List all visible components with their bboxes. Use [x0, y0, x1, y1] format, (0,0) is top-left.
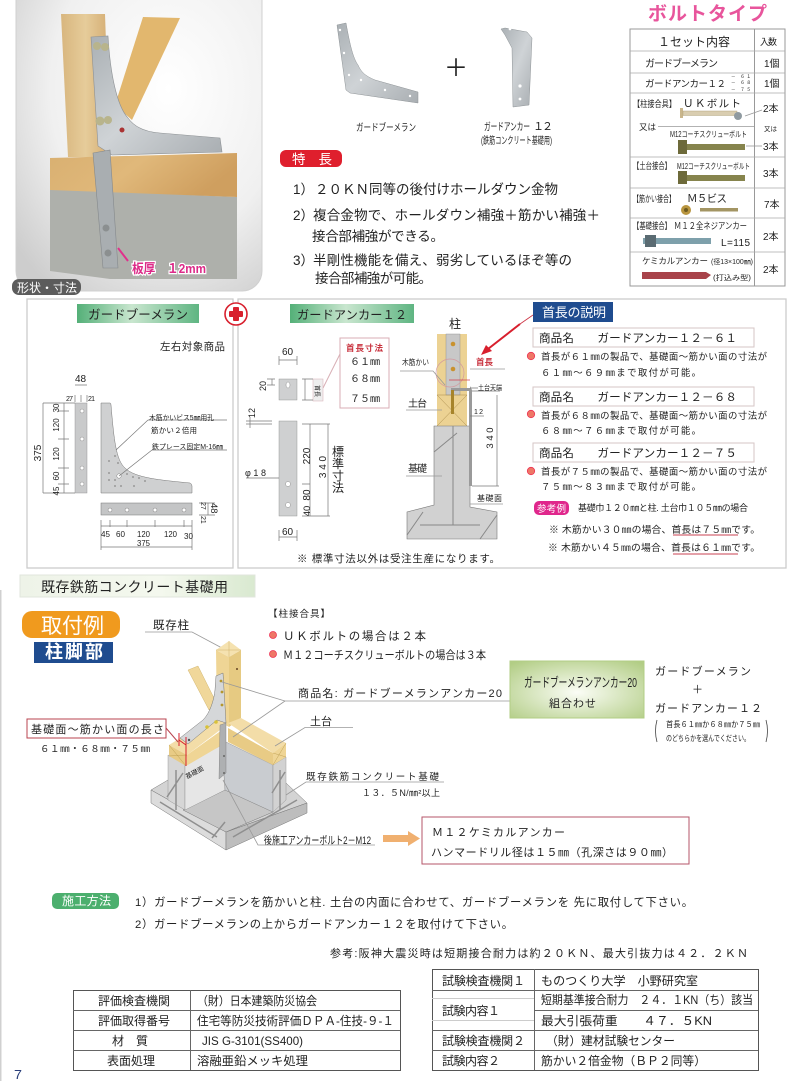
table: test results: 最大引張荷重 ４７．５KN [541, 1014, 712, 1028]
text: feature list [293, 181, 600, 286]
badge: installation example [22, 611, 120, 638]
table: set contents: ＵＫボルト [683, 98, 741, 110]
photo callout: plate thickness: 板厚 １2mm [132, 261, 206, 276]
tag: construction method [52, 893, 119, 909]
arrow: to chemical anchor [383, 831, 420, 846]
dimensions: boomerang: 筋かい２倍用 [151, 425, 197, 435]
text: example condition: 基礎巾１２０㎜と柱. 土台巾１０５㎜の場合 [578, 502, 748, 513]
photo: boomerang plate [91, 36, 222, 155]
dimensions: boomerang: 60 [116, 529, 125, 539]
text: 61 explanation [527, 351, 768, 378]
labels: section view: 基礎面 [477, 493, 502, 503]
table: set contents: 2本 [763, 102, 779, 115]
text: 68 explanation: ６８㎜～７６㎜まで取付が可能。 [541, 425, 701, 436]
table: evaluation: 住宅等防災技術評価ＤＰＡ-住技-９-１ [197, 1013, 394, 1028]
labels: section view: 柱 [449, 317, 461, 331]
labels: section view: 基礎 [408, 462, 427, 475]
tag: reference example [534, 501, 569, 515]
badge: post base: 柱脚部 [45, 642, 103, 662]
table: set contents: 又は [764, 125, 778, 133]
photo callout: plate thickness [118, 248, 206, 276]
sills [228, 718, 286, 753]
heading: guard anchor 12 [290, 304, 414, 323]
text: feature list: ２０ＫＮ同等の後付けホールダウン金物 [315, 181, 558, 197]
text: construction steps: 1）ガードブーメランを筋かいと柱. 土台の内面に合わせて、ガードブーメランを 先に取付して下さい。 [135, 895, 693, 909]
table: set contents: M12コーチスクリューボルト [670, 130, 747, 139]
labels: section view: 木筋かい [402, 357, 429, 367]
heading: features [280, 150, 342, 167]
box: product combination: 組合わせ [549, 697, 596, 710]
dimensions: boomerang: 120 [52, 447, 61, 461]
text: 68 explanation: 首長が６８㎜の製品で、基礎面～筋かい面の寸法が [541, 410, 768, 421]
text: 75 explanation: 首長が７５㎜の製品で、基礎面～筋かい面の寸法が [541, 466, 768, 477]
label: anchor use: (鉄筋コンクリート基礎用) [481, 134, 552, 147]
dimensions: boomerang: 45 [52, 486, 61, 495]
text: combination contents: のどちらかを選んでください。 [666, 733, 750, 743]
text: post hardware list [268, 608, 486, 662]
dimensions: anchor: 40 [302, 506, 313, 516]
table: set contents: ガードブーメラン [645, 57, 718, 70]
photo: sill [50, 153, 237, 197]
table: set contents: 1個 [764, 57, 780, 70]
dimensions: boomerang: 48 [75, 374, 87, 385]
dimensions: boomerang: 60 [52, 471, 61, 480]
table: set contents: 【柱接合具】 [633, 98, 676, 109]
dimensions: anchor: 寸 [332, 469, 344, 483]
icon: plus in red circle [225, 303, 247, 325]
text: concrete strength: １３．５N/㎜²以上 [362, 788, 440, 798]
box: product combination [510, 661, 644, 718]
icon: anchor plate [501, 28, 532, 107]
dimensions: boomerang: 120 [52, 418, 61, 432]
dimensions: boomerang: 21 [88, 396, 95, 403]
panel: product photo [16, 0, 262, 291]
label box: neck length: ７５㎜ [350, 394, 380, 405]
heading: existing RC foundation: 既存鉄筋コンクリート基礎用 [41, 579, 228, 595]
icon: M5 screw [681, 205, 738, 215]
text: combination contents [655, 664, 768, 743]
text: 68 explanation [527, 410, 768, 436]
dimensions: anchor: 220 [302, 447, 313, 464]
table: set contents: 3本 [763, 167, 779, 180]
box: product name 61: 商品名 ガードアンカー１２－６１ [539, 331, 737, 345]
table: set contents: 【基礎接合】 [633, 220, 671, 231]
dimensions: boomerang: 45 [101, 529, 110, 539]
boomerang [180, 673, 226, 744]
drawing: boomerang front [101, 403, 192, 493]
dimensions: boomerang: 375 [33, 444, 44, 461]
table: evaluation: （財）日本建築防災協会 [197, 993, 317, 1008]
table: test results: ものつくり大学 小野研究室 [541, 973, 698, 988]
table: set contents: Ｍ５ビス [687, 193, 727, 205]
text: post hardware list: 【柱接合具】 [268, 608, 330, 620]
table: set contents: M12コーチスクリューボルト [677, 162, 750, 171]
label: sill [275, 714, 353, 746]
drawing: side plate [75, 403, 87, 493]
badge: post base [34, 642, 113, 663]
text: 75 explanation [527, 466, 768, 492]
icon: boomerang plate [337, 23, 418, 103]
dimensions: boomerang: 120 [137, 529, 150, 539]
tag: construction method: 施工方法 [62, 893, 111, 908]
label: sill: 土台 [310, 714, 332, 728]
rebar [160, 770, 297, 838]
box: product name 75 [533, 443, 754, 462]
label box: neck length: 首長寸法 [346, 343, 383, 353]
badge: installation example: 取付例 [41, 615, 104, 638]
icon: UK bolt [680, 108, 742, 120]
table: evaluation: 評価検査機関 [98, 994, 170, 1008]
table: set contents: 2本 [763, 230, 779, 243]
label: existing RC foundation: 既存鉄筋コンクリート基礎 [306, 771, 439, 783]
table: test results: 試験検査機関１ [442, 973, 525, 988]
brace [188, 666, 216, 710]
table: set contents: 1個 [764, 77, 780, 90]
dimensions: boomerang: 木筋かいビス5㎜用孔 [149, 413, 214, 422]
table: evaluation: 溶融亜鉛メッキ処理 [197, 1054, 308, 1068]
box: product name 75: 商品名 ガードアンカー１２－７５ [539, 446, 737, 460]
label: anchor: １２ [533, 121, 553, 133]
label: product name: 商品名: ガードブーメランアンカー20 [298, 686, 502, 700]
box: chemical anchor: Ｍ１２ケミカルアンカー [432, 826, 565, 839]
photo: concrete foundation [50, 189, 237, 279]
dimensions: boomerang [33, 374, 227, 550]
panel: guard anchor dimensions and explanation [238, 299, 786, 568]
text: feature list: 3） [293, 253, 314, 268]
label: existing post [145, 618, 222, 648]
dimensions: boomerang: 375 [137, 538, 150, 548]
box: chemical anchor [422, 817, 689, 864]
label: existing RC foundation [286, 771, 444, 795]
box: product combination: ガードブーメランアンカー20 [524, 675, 637, 690]
table: set contents: 2本 [763, 263, 779, 276]
text: combination contents: ガードブーメラン [655, 664, 751, 678]
table: set contents: 入数 [760, 36, 777, 47]
table: set contents: － ６８ [731, 80, 751, 85]
labels: section view: 土台天端 [478, 383, 502, 392]
table: set contents [630, 29, 785, 286]
label: boomerang: ガードブーメラン [356, 121, 416, 134]
text: example 45mm: ※ 木筋かい４５㎜の場合、首長は６１㎜です。 [548, 541, 760, 554]
text: post hardware list: ＵＫボルトの場合は２本 [283, 629, 426, 643]
labels: section view: 3 4 0 [485, 427, 496, 449]
foundation walls [168, 755, 185, 810]
icon: coach screw [678, 140, 745, 154]
table: test results: 筋かい２倍金物（ＢＰ２同等） [541, 1053, 706, 1068]
dimensions: boomerang: 鉄プレース固定M-16㎜ [152, 442, 223, 451]
box: chemical anchor: ハンマードリル径は１５㎜（孔深さは９０㎜） [431, 846, 673, 859]
label box: neck length: ６１㎜ [350, 357, 380, 368]
heading: neck length explanation [533, 302, 613, 322]
dimensions: boomerang: 21 [199, 516, 206, 524]
table: set contents: 【土台接合】 [633, 160, 671, 171]
label: post-installed anchor bolt: 後施工アンカーボルト2－M12 [264, 833, 371, 847]
photo: anchor strap [93, 150, 118, 268]
dimensions: anchor: 標 [332, 445, 344, 459]
drawing: boomerang bottom plate [101, 503, 192, 515]
dimensions: anchor: 12 [247, 408, 257, 418]
dimensions: boomerang: 27 [66, 396, 73, 403]
dimensions: anchor: 60 [282, 347, 294, 358]
panel: guard boomerang dimensions [27, 299, 233, 568]
text: combination contents: ＋ [692, 684, 703, 696]
footing [151, 780, 307, 832]
table: evaluation: 材 質 [112, 1033, 148, 1048]
text: 61 explanation: 首長が６１㎜の製品で、基礎面～筋かい面の寸法が [541, 351, 768, 362]
dimensions: anchor: 準 [332, 456, 344, 471]
icon: full-thread anchor [643, 235, 711, 247]
dimensions: anchor: 20 [258, 381, 268, 391]
dimensions: anchor: 法 [332, 481, 344, 495]
text: post hardware list: Ｍ１２コーチスクリューボルトの場合は３本 [283, 648, 486, 662]
diagram: 3D foundation and hardware: 基礎面 [184, 763, 206, 781]
label: existing post: 既存柱 [153, 618, 190, 632]
table: set contents: (打込み型) [713, 273, 751, 282]
dimensions: boomerang: 30 [52, 403, 61, 412]
table: set contents: Ｍ１２全ネジアンカー [674, 220, 747, 231]
dimensions: anchor: 80 [302, 489, 313, 501]
icon: chemical anchor [642, 272, 711, 279]
table: test results: 短期基準接合耐力 ２４．１KN（ち）該当 [541, 992, 753, 1007]
table: set contents: (径13×100㎜) [711, 257, 753, 266]
post [216, 650, 229, 727]
note: custom production: ※ 標準寸法以外は受注生産になります。 [297, 552, 500, 565]
box: product name 68 [533, 387, 754, 406]
table: set contents: 【筋かい接合】 [633, 193, 675, 204]
dimensions: anchor [245, 347, 344, 541]
text: feature list: 半剛性機能を備え、弱劣しているほぞ等の [313, 252, 572, 268]
icon: plus sign: ＋ [444, 55, 468, 82]
heading: guard anchor 12: ガードアンカー１２ [297, 308, 407, 322]
dimensions: boomerang: 27 [199, 502, 206, 510]
text: lengths: ６１㎜・６８㎜・７５㎜ [40, 744, 150, 755]
table: set contents: － ７５ [731, 87, 751, 92]
dimensions: boomerang: 120 [164, 529, 177, 539]
table: set contents: １セット内容 [658, 35, 730, 49]
arrow: neck length [481, 315, 533, 355]
decorative left edge [0, 590, 2, 1081]
labels: section view: 12 [474, 409, 483, 416]
text: symmetric product: 左右対象商品 [160, 340, 225, 353]
table: test results: 試験検査機関２ [442, 1033, 525, 1048]
red dimension [179, 733, 186, 766]
table: set contents: 又は [639, 122, 657, 132]
table: set contents: － ６１ [731, 74, 751, 79]
table: evaluation [73, 990, 400, 1070]
anchor strap [219, 723, 226, 779]
photo: brace [115, 17, 180, 120]
heading: bolt type: ボルトタイプ [648, 3, 767, 25]
text: feature list: 複合金物で、ホールダウン補強＋筋かい補強＋ [313, 207, 600, 223]
labels: section view [400, 317, 505, 504]
labels: section view: 首長 [476, 357, 493, 367]
label box: neck length: 首長 [313, 385, 321, 397]
dimensions: boomerang: 30 [184, 531, 193, 541]
diagram: 3D foundation and hardware [151, 641, 307, 850]
text: feature list: 接合部補強が可能。 [315, 271, 432, 286]
text: example 30mm: ※ 木筋かい３０㎜の場合、首長は７５㎜です。 [549, 523, 760, 536]
dimensions: anchor: 60 [282, 527, 294, 538]
drawing: section view [407, 334, 500, 539]
table: evaluation: JIS G-3101(SS400) [202, 1034, 303, 1048]
label: post-installed anchor bolt [223, 780, 375, 847]
text: 75 explanation: ７５㎜～８３㎜まで取付が可能。 [541, 481, 701, 492]
table: set contents: ガードアンカー１２ [645, 79, 726, 90]
label: shape and dimensions: 形状・寸法 [17, 281, 77, 295]
heading: existing RC foundation [20, 575, 255, 597]
table: test results: 試験内容２ [442, 1053, 500, 1068]
text: 61 explanation: ６１㎜～６９㎜まで取付が可能。 [541, 367, 701, 378]
heading: guard boomerang [77, 304, 199, 323]
label: product name [222, 682, 510, 737]
dimensions: anchor: φ18 [245, 468, 266, 478]
table: test results: 試験内容１ [442, 1003, 500, 1018]
table: evaluation: 評価取得番号 [98, 1013, 170, 1028]
box: product name 68: 商品名 ガードアンカー１２－６８ [539, 390, 737, 404]
table: test results [432, 969, 758, 1070]
text: combination contents: 首長６１㎜か６８㎜か７５㎜ [666, 719, 760, 729]
drawing: anchor front view [279, 421, 297, 516]
table: set contents: 3本 [763, 140, 779, 153]
label box: neck length: ６８㎜ [350, 374, 380, 385]
labels: section view: 土台 [408, 397, 427, 410]
table: set contents: L=115 [721, 238, 750, 249]
icon: coach screw [678, 171, 745, 184]
table: set contents: ケミカルアンカー [642, 256, 708, 266]
heading: neck length explanation: 首長の説明 [542, 305, 606, 320]
heading: features: 特 長 [292, 152, 332, 167]
callout: foundation to brace length: 基礎面～筋かい面の長さ [31, 722, 164, 736]
table: evaluation: 表面処理 [107, 1054, 155, 1068]
text: feature list: 接合部補強ができる。 [312, 229, 444, 244]
label: anchor: ガードアンカー [484, 121, 530, 133]
callout: foundation to brace length [27, 719, 178, 742]
drawing: anchor top view [279, 379, 297, 400]
table: set contents: 7本 [764, 198, 780, 211]
dimensions: boomerang: 48 [208, 503, 219, 514]
text: combination contents: ガードアンカー１２ [655, 702, 762, 715]
heading: guard boomerang: ガードブーメラン [88, 307, 188, 322]
text: reference note: 参考:阪神大震災時は短期接合耐力は約２０ＫＮ、最大引抜力は４２．２ＫＮ [330, 946, 748, 960]
box: product name 61 [533, 328, 754, 347]
dimensions: anchor: 3 4 0 [318, 455, 329, 478]
table: test results: （財）建材試験センター [546, 1033, 675, 1048]
tag: reference example: 参考例 [537, 503, 566, 515]
text: feature list: 2） [293, 208, 314, 223]
photo: wood post [61, 14, 110, 157]
text: construction steps [135, 895, 693, 931]
text: construction steps: 2）ガードブーメランの上からガードアンカー１２を取付けて下さい。 [135, 917, 513, 931]
label box: neck length [313, 338, 389, 408]
text: feature list: 1） [293, 182, 314, 197]
